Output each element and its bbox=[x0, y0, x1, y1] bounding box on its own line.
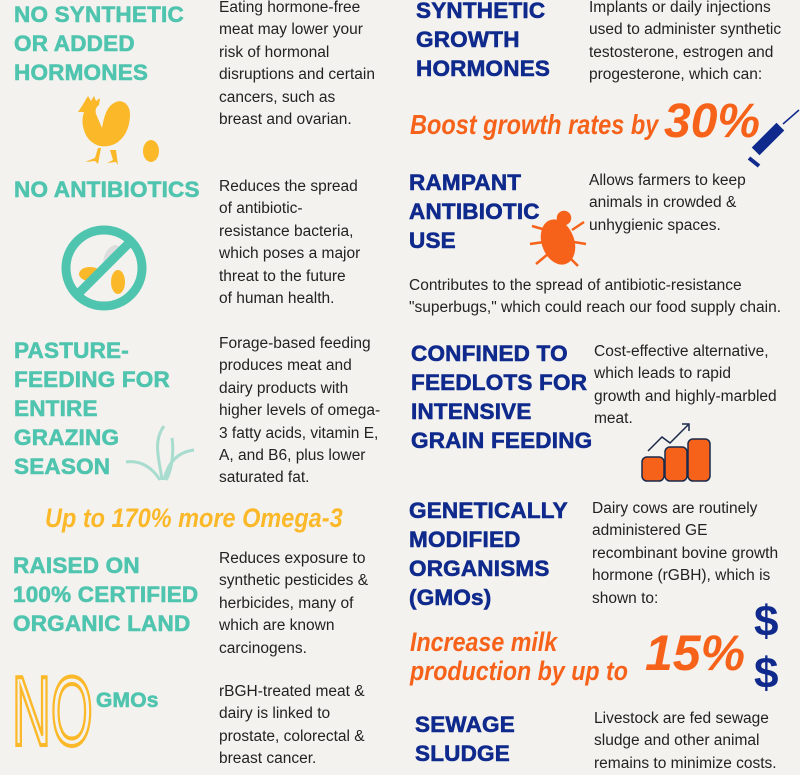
icon: bug bbox=[530, 210, 586, 267]
text: superbugs: "superbugs," which could reach our food supply chain. bbox=[409, 299, 781, 316]
heading: pasture feeding: ENTIRE bbox=[14, 396, 98, 421]
callout: boost growth: Boost growth rates by bbox=[410, 109, 658, 140]
text: implants: testosterone, estrogen and bbox=[589, 44, 773, 61]
text: rBGH dairy: Dairy cows are routinely bbox=[592, 500, 757, 517]
heading: synthetic growth hormones: HORMONES bbox=[416, 56, 550, 81]
text: hormone-free bbox=[219, 0, 375, 128]
text: antibiotics: which poses a major bbox=[219, 245, 360, 262]
callout number: 30%: 30% bbox=[664, 95, 760, 148]
heading: feedlots bbox=[411, 341, 592, 453]
heading: GMOs: (GMOs) bbox=[409, 585, 491, 610]
text: crowded: Allows farmers to keep bbox=[589, 172, 746, 189]
text: antibiotics: of human health. bbox=[219, 290, 334, 307]
text: antibiotics: threat to the future bbox=[219, 268, 346, 285]
icon: grass bbox=[126, 425, 194, 481]
text: sewage: remains to minimize costs. bbox=[594, 755, 777, 772]
heading: sewage sludge bbox=[415, 712, 515, 766]
text: feedlots: growth and highly-marbled bbox=[594, 388, 777, 405]
heading: no synthetic hormones: HORMONES bbox=[14, 60, 148, 85]
text: organic: which are known bbox=[219, 617, 334, 634]
heading: no antibiotics: NO ANTIBIOTICS bbox=[14, 177, 200, 202]
text: rBGH: dairy is linked to bbox=[219, 705, 330, 722]
text: organic: synthetic pesticides & bbox=[219, 572, 368, 589]
text: organic bbox=[219, 550, 368, 657]
heading: sewage sludge: SEWAGE bbox=[415, 712, 515, 737]
icon: coins bbox=[641, 423, 711, 482]
text: sewage: sludge and other animal bbox=[594, 732, 759, 749]
icon: dollars: $ bbox=[754, 597, 778, 646]
heading: pasture feeding bbox=[14, 338, 170, 479]
heading: feedlots: CONFINED TO bbox=[411, 341, 568, 366]
text: rBGH dairy: recombinant bovine growth bbox=[592, 545, 778, 562]
icon: dollars bbox=[754, 597, 778, 698]
heading: no synthetic hormones: NO SYNTHETIC bbox=[14, 2, 184, 27]
text: pasture bbox=[219, 335, 380, 486]
heading: organic land: ORGANIC LAND bbox=[13, 611, 190, 636]
heading: pasture feeding: FEEDING FOR bbox=[14, 367, 170, 392]
text: hormone-free: cancers, such as bbox=[219, 89, 335, 106]
callout: milk: production by up to bbox=[410, 656, 628, 686]
heading: sewage sludge: SLUDGE bbox=[415, 741, 510, 766]
heading: rampant antibiotic use: USE bbox=[409, 228, 456, 253]
text: hormone-free: meat may lower your bbox=[219, 21, 363, 38]
text: implants: used to administer synthetic bbox=[589, 21, 781, 38]
heading: no GMOs bbox=[15, 674, 159, 748]
icon: syringe bbox=[748, 110, 800, 168]
heading: rampant antibiotic use: RAMPANT bbox=[409, 170, 521, 195]
text: pasture: Forage-based feeding bbox=[219, 335, 371, 352]
heading: synthetic growth hormones bbox=[416, 0, 550, 81]
text: superbugs bbox=[409, 277, 781, 316]
heading: rampant antibiotic use bbox=[409, 170, 540, 253]
heading: no synthetic hormones: OR ADDED bbox=[14, 31, 135, 56]
heading: pasture feeding: SEASON bbox=[14, 454, 110, 479]
text: feedlots bbox=[594, 343, 777, 427]
text: antibiotics bbox=[219, 178, 360, 307]
heading: feedlots: GRAIN FEEDING bbox=[411, 428, 592, 453]
text: pasture: A, and B6, plus lower bbox=[219, 447, 365, 464]
text: rBGH: rBGH-treated meat & bbox=[219, 683, 365, 700]
text: pasture: higher levels of omega- bbox=[219, 402, 380, 419]
text: rBGH dairy: hormone (rGBH), which is bbox=[592, 567, 770, 584]
heading: GMOs: ORGANISMS bbox=[409, 556, 550, 581]
heading: feedlots: FEEDLOTS FOR bbox=[411, 370, 587, 395]
text: pasture: dairy products with bbox=[219, 380, 348, 397]
text: feedlots: Cost-effective alternative, bbox=[594, 343, 769, 360]
text: antibiotics: of antibiotic- bbox=[219, 200, 303, 217]
text: organic: carcinogens. bbox=[219, 640, 307, 657]
text: antibiotics: resistance bacteria, bbox=[219, 223, 353, 240]
heading: synthetic growth hormones: GROWTH bbox=[416, 27, 520, 52]
text: rBGH: prostate, colorectal & bbox=[219, 728, 365, 745]
heading: no GMOs: GMOs bbox=[96, 689, 159, 712]
heading: organic land bbox=[13, 553, 198, 636]
text: rBGH bbox=[219, 683, 365, 767]
heading: GMOs: GENETICALLY bbox=[409, 498, 568, 523]
icon: no pills bbox=[62, 226, 146, 310]
heading: pasture feeding: PASTURE- bbox=[14, 338, 129, 363]
text: crowded: animals in crowded & bbox=[589, 194, 736, 211]
callout: omega-3: Up to 170% more Omega-3 bbox=[45, 503, 343, 533]
text: pasture: 3 fatty acids, vitamin E, bbox=[219, 425, 378, 442]
text: sewage bbox=[594, 710, 777, 772]
heading: pasture feeding: GRAZING bbox=[14, 425, 119, 450]
heading: organic land: RAISED ON bbox=[13, 553, 140, 578]
text: hormone-free: risk of hormonal bbox=[219, 44, 329, 61]
icon: dollars: $ bbox=[754, 649, 778, 698]
heading: feedlots: INTENSIVE bbox=[411, 399, 532, 424]
callout: milk: Increase milk bbox=[410, 627, 557, 657]
text: feedlots: which leads to rapid bbox=[594, 365, 731, 382]
text: sewage: Livestock are fed sewage bbox=[594, 710, 769, 727]
text: organic: Reduces exposure to bbox=[219, 550, 365, 567]
text: pasture: saturated fat. bbox=[219, 469, 309, 486]
heading: no synthetic hormones bbox=[14, 2, 184, 85]
text: crowded: unhygienic spaces. bbox=[589, 217, 721, 234]
callout: milk bbox=[410, 627, 628, 686]
text: feedlots: meat. bbox=[594, 410, 633, 427]
text: pasture: produces meat and bbox=[219, 357, 352, 374]
text: organic: herbicides, many of bbox=[219, 595, 353, 612]
heading: GMOs: MODIFIED bbox=[409, 527, 521, 552]
heading: GMOs bbox=[409, 498, 568, 610]
text: rBGH: breast cancer. bbox=[219, 750, 316, 767]
text: rBGH dairy: shown to: bbox=[592, 590, 658, 607]
icon: rooster and egg bbox=[78, 96, 159, 165]
heading: rampant antibiotic use: ANTIBIOTIC bbox=[409, 199, 540, 224]
text: crowded bbox=[589, 172, 746, 234]
text: superbugs: Contributes to the spread of antibiotic-resistance bbox=[409, 277, 742, 294]
text: hormone-free: breast and ovarian. bbox=[219, 111, 352, 128]
callout number: 15%: 15% bbox=[645, 625, 745, 681]
text: rBGH dairy: administered GE bbox=[592, 522, 707, 539]
text: rBGH dairy bbox=[592, 500, 778, 607]
text: hormone-free: disruptions and certain bbox=[219, 66, 375, 83]
text: antibiotics: Reduces the spread bbox=[219, 178, 358, 195]
text: implants: progesterone, which can: bbox=[589, 66, 762, 83]
text: implants bbox=[589, 0, 781, 83]
heading: organic land: 100% CERTIFIED bbox=[13, 582, 198, 607]
